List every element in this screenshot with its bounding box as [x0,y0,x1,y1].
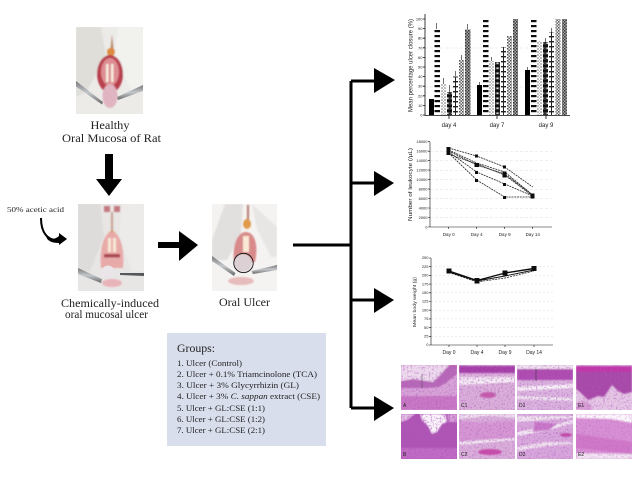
line chart: number of leukocyte: 16000 [416,148,428,154]
photo: chemically-induced ulcer [78,204,144,291]
line chart: number of leukocyte: 8000 [419,186,428,191]
line chart: mean body weight: 225 [422,264,429,269]
line chart: mean body weight: Mean body weight (g) [412,276,417,327]
bar chart: mean percentage ulcer closure: 50 [418,64,423,70]
photo: healthy oral mucosa of rat [76,27,143,114]
line chart: number of leukocyte [408,139,552,237]
bar chart: mean percentage ulcer closure: Mean percentage ulcer closure (%) [408,19,414,112]
bar chart: mean percentage ulcer closure: 0 [420,112,423,118]
line chart: number of leukocyte: Day 4 [471,232,483,237]
line chart: number of leukocyte: Day 9 [499,232,511,237]
line chart: number of leukocyte: 18000 [416,139,428,144]
micrograph B: B [403,452,407,458]
micrograph D1 [517,365,573,410]
heading: groups: Groups: [177,343,215,355]
line chart: mean body weight: 25 [424,334,429,338]
arrow: curved acetic acid application [41,218,67,245]
line chart: number of leukocyte: 14000 [416,158,428,163]
label: chemically-induced oral mucosal ulcer [61,296,159,321]
list: treatment groups: 5. Ulcer + GL:CSE (1:1) [177,403,265,413]
list: treatment groups: 4. Ulcer + 3% C. sappan extract (CSE) [177,391,320,401]
micrograph D2 [517,414,573,459]
line chart: mean body weight: 100 [422,307,429,312]
line chart: mean body weight: Day 9 [498,350,512,356]
bar chart: mean percentage ulcer closure: day 7 [490,123,505,129]
panel: histology micrographs [401,364,632,459]
bar chart: mean percentage ulcer closure: 10 [418,103,423,108]
label: healthy oral mucosa: Oral Mucosa of Rat [62,131,162,145]
line chart: mean body weight: Day 14 [526,350,542,356]
list: treatment groups [177,358,320,435]
micrograph A [401,364,457,410]
line chart: mean body weight: 150 [422,290,429,295]
label: acetic acid: 50% acetic acid [7,205,64,214]
label: chemically-induced oral mucosal ulcer: Chemically-induced [61,296,159,310]
micrograph B [401,414,457,459]
line chart: number of leukocyte: 12000 [416,167,428,172]
panel: groups [167,333,326,446]
label: oral ulcer: Oral Ulcer [219,295,270,309]
micrograph C1 [459,365,515,410]
micrograph D2: D2 [519,452,526,458]
bar chart: mean percentage ulcer closure: day 9 [539,123,554,129]
line chart: mean body weight: 175 [422,281,429,286]
arrow: induced to oral ulcer [158,231,198,261]
bar chart: mean percentage ulcer closure: 30 [418,84,423,89]
line chart: number of leukocyte: Day 0 [443,232,455,237]
line chart: number of leukocyte: 2000 [419,215,428,220]
micrograph C2 [459,414,515,459]
list: treatment groups: 7. Ulcer + GL:CSE (2:1) [177,425,265,435]
list: treatment groups: 3. Ulcer + 3% Glycyrrhizin (GL) [177,380,299,390]
line chart: mean body weight: 0 [426,342,429,347]
list: treatment groups: 2. Ulcer + 0.1% Triamcinolone (TCA) [177,369,317,379]
list: treatment groups: 6. Ulcer + GL:CSE (1:2) [177,414,265,424]
micrograph E1: E1 [578,403,584,409]
micrograph E2 [576,414,632,459]
label: healthy oral mucosa: Healthy [90,118,130,132]
bar chart: mean percentage ulcer closure: 90 [418,26,423,31]
line chart: mean body weight: 250 [422,255,429,260]
bar chart: mean percentage ulcer closure: 70 [418,45,423,50]
connector: branching lines and arrows to results [293,68,395,421]
micrograph C1: C1 [461,403,468,409]
line chart: mean body weight: Day 0 [442,350,456,356]
bar chart: mean percentage ulcer closure [408,14,570,129]
micrograph D1: D1 [519,403,526,409]
bar chart: mean percentage ulcer closure: day 4 [442,123,457,129]
bar chart: mean percentage ulcer closure: 80 [418,36,423,41]
bar chart: mean percentage ulcer closure: 40 [418,74,423,79]
line chart: mean body weight: Day 4 [470,350,484,356]
line chart: mean body weight: 200 [422,273,429,278]
label: chemically-induced oral mucosal ulcer: oral mucosal ulcer [65,307,148,321]
photo: oral ulcer [212,204,277,291]
line chart: number of leukocyte: 0 [425,224,428,229]
micrograph C2: C2 [461,452,468,458]
bar chart: mean percentage ulcer closure: 100 [416,16,423,22]
micrograph E2: E2 [578,452,584,458]
line chart: mean body weight [412,255,553,356]
bar chart: mean percentage ulcer closure: 60 [418,55,423,60]
line chart: number of leukocyte: 6000 [419,196,428,201]
line chart: number of leukocyte: Number of leukocyte (/µL) [408,148,414,221]
line chart: mean body weight: 50 [424,325,429,330]
line chart: number of leukocyte: Day 14 [526,232,540,237]
arrow: healthy to induced [96,154,122,196]
line chart: number of leukocyte: 4000 [419,205,428,210]
line chart: mean body weight: 125 [422,299,429,304]
list: treatment groups: 1. Ulcer (Control) [177,358,242,368]
line chart: mean body weight: 75 [424,316,429,321]
line chart: number of leukocyte: 10000 [416,177,428,182]
label: healthy oral mucosa [62,118,162,145]
bar chart: mean percentage ulcer closure: 20 [418,93,423,98]
micrograph E1 [576,365,632,410]
micrograph A: A [403,403,407,409]
